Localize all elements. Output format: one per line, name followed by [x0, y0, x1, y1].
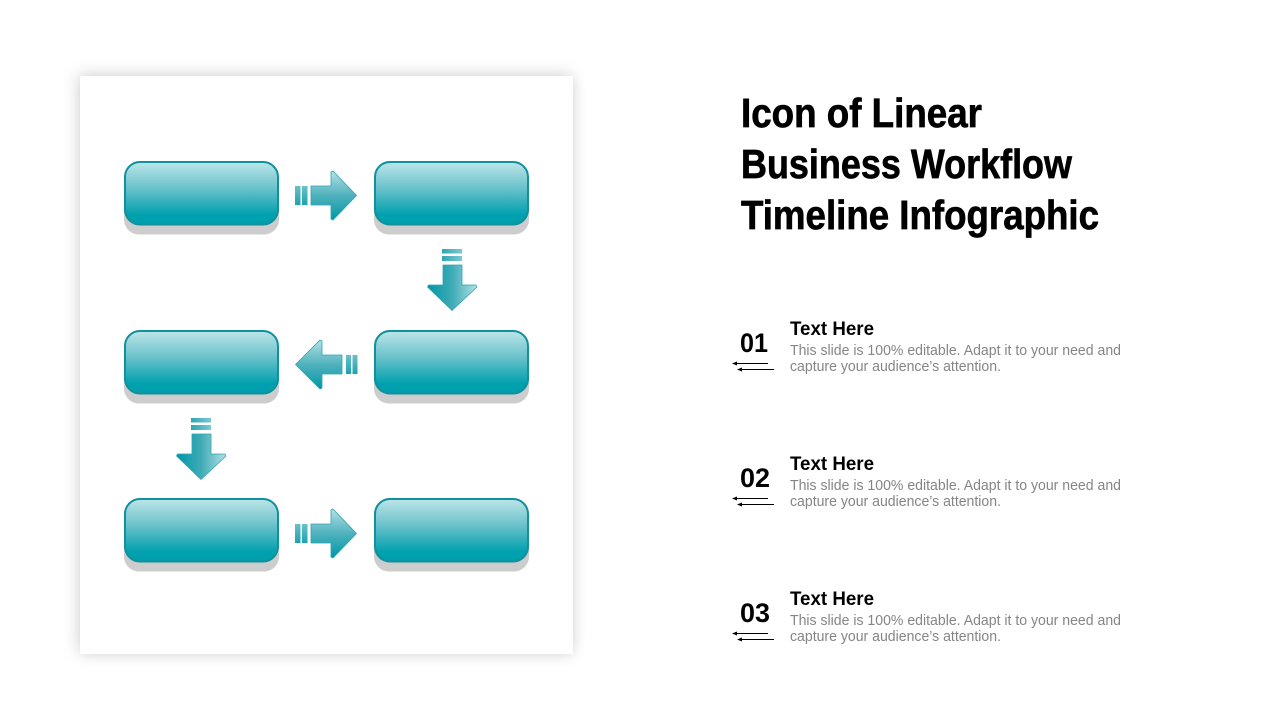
description 03 [790, 613, 1121, 645]
item 01 [732, 319, 1121, 375]
workflow diagram [124, 162, 529, 572]
icon: double arrows 01 [732, 362, 774, 372]
number 02: 02 [740, 463, 770, 493]
icon: double arrows 02 [732, 496, 774, 506]
box 6 [374, 499, 529, 572]
description 01: This slide is 100% editable. Adapt it to your need and [790, 343, 1121, 359]
number 01: 01 [740, 328, 768, 358]
box 5 [124, 499, 279, 572]
title [741, 90, 1099, 238]
arrow: box 1 to box 2 [295, 171, 356, 220]
box 2 [374, 162, 529, 234]
arrow: box 4 to box 5 [176, 418, 226, 480]
description 01: capture your audience’s attention. [790, 359, 1001, 375]
box 4 [124, 331, 279, 404]
description 03: capture your audience’s attention. [790, 629, 1001, 645]
title: Timeline Infographic [741, 192, 1099, 238]
heading 01: Text Here [790, 319, 874, 340]
title: Icon of Linear [741, 90, 982, 136]
item 03 [732, 589, 1121, 645]
heading 02: Text Here [790, 454, 874, 475]
heading 03: Text Here [790, 589, 874, 610]
icon: double arrows 03 [732, 632, 774, 642]
description 02 [790, 478, 1121, 510]
arrow: box 2 to box 3 [428, 249, 477, 310]
box 1 [124, 162, 279, 234]
item 02 [732, 454, 1121, 510]
description 01 [790, 343, 1121, 375]
description 03: This slide is 100% editable. Adapt it to your need and [790, 613, 1121, 629]
panel: workflow card background [80, 76, 573, 654]
description 02: This slide is 100% editable. Adapt it to your need and [790, 478, 1121, 494]
box 3 [374, 331, 529, 404]
arrow: box 3 to box 4 [296, 340, 358, 389]
description 02: capture your audience’s attention. [790, 494, 1001, 510]
arrow: box 5 to box 6 [295, 509, 356, 558]
number 03: 03 [740, 598, 770, 628]
title: Business Workflow [741, 141, 1072, 187]
